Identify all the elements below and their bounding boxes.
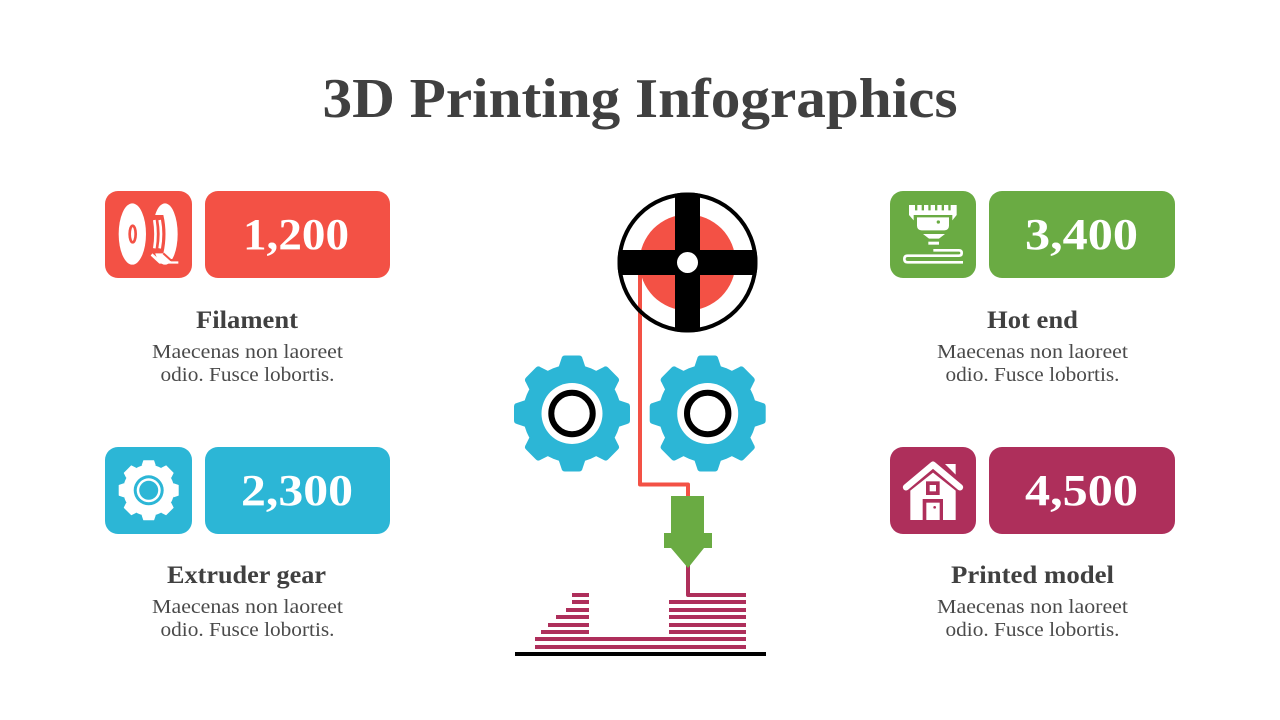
value box: 3,400 — [989, 191, 1175, 278]
text block: extruder description: odio. Fusce lobortis. — [160, 620, 334, 641]
filament spool wheel — [615, 190, 760, 335]
text block: printed model description: Maecenas non laoreet — [937, 597, 1129, 618]
text block: printed model description: odio. Fusce lobortis. — [946, 620, 1120, 641]
icon: hot end nozzle — [890, 191, 976, 278]
value box: 1,200: 1,200 — [243, 210, 349, 259]
text block: hot end description: odio. Fusce lobortis. — [946, 365, 1120, 386]
right extruder gear — [650, 356, 765, 471]
central 3D printer diagram — [514, 190, 766, 656]
text block: extruder description: Maecenas non laoreet — [152, 597, 344, 618]
heading: Extruder gear: Extruder gear — [167, 562, 326, 589]
text block: hot end description — [937, 342, 1129, 386]
text block: printed model description — [937, 597, 1129, 641]
text block: extruder description — [152, 597, 344, 641]
heading: Hot end: Hot end — [987, 307, 1078, 334]
text block: filament description: odio. Fusce lobortis. — [160, 365, 334, 386]
panel: filament — [105, 191, 390, 386]
nozzle arrow — [664, 496, 712, 568]
icon: filament spool — [105, 191, 192, 278]
text block: filament description: Maecenas non laoreet — [152, 342, 344, 363]
value box: 2,300 — [205, 447, 390, 534]
heading: Printed model: Printed model — [951, 562, 1114, 589]
value box: 3,400: 3,400 — [1025, 210, 1138, 259]
heading: Filament: Filament — [196, 307, 299, 334]
icon: gear — [105, 447, 192, 534]
filament line — [640, 315, 688, 497]
title: 3D Printing Infographics — [322, 68, 958, 130]
value box: 4,500 — [989, 447, 1175, 534]
print bed — [515, 652, 766, 656]
text block: hot end description: Maecenas non laoreet — [937, 342, 1129, 363]
panel: extruder gear — [105, 447, 390, 641]
left extruder gear — [514, 356, 630, 471]
text block: filament description — [152, 342, 344, 386]
value box: 2,300: 2,300 — [241, 466, 353, 515]
panel: printed model — [890, 447, 1175, 641]
value box: 1,200 — [205, 191, 390, 278]
value box: 4,500: 4,500 — [1025, 466, 1138, 515]
panel: hot end — [890, 191, 1175, 386]
printed layers — [535, 565, 746, 649]
icon: house — [890, 447, 976, 534]
